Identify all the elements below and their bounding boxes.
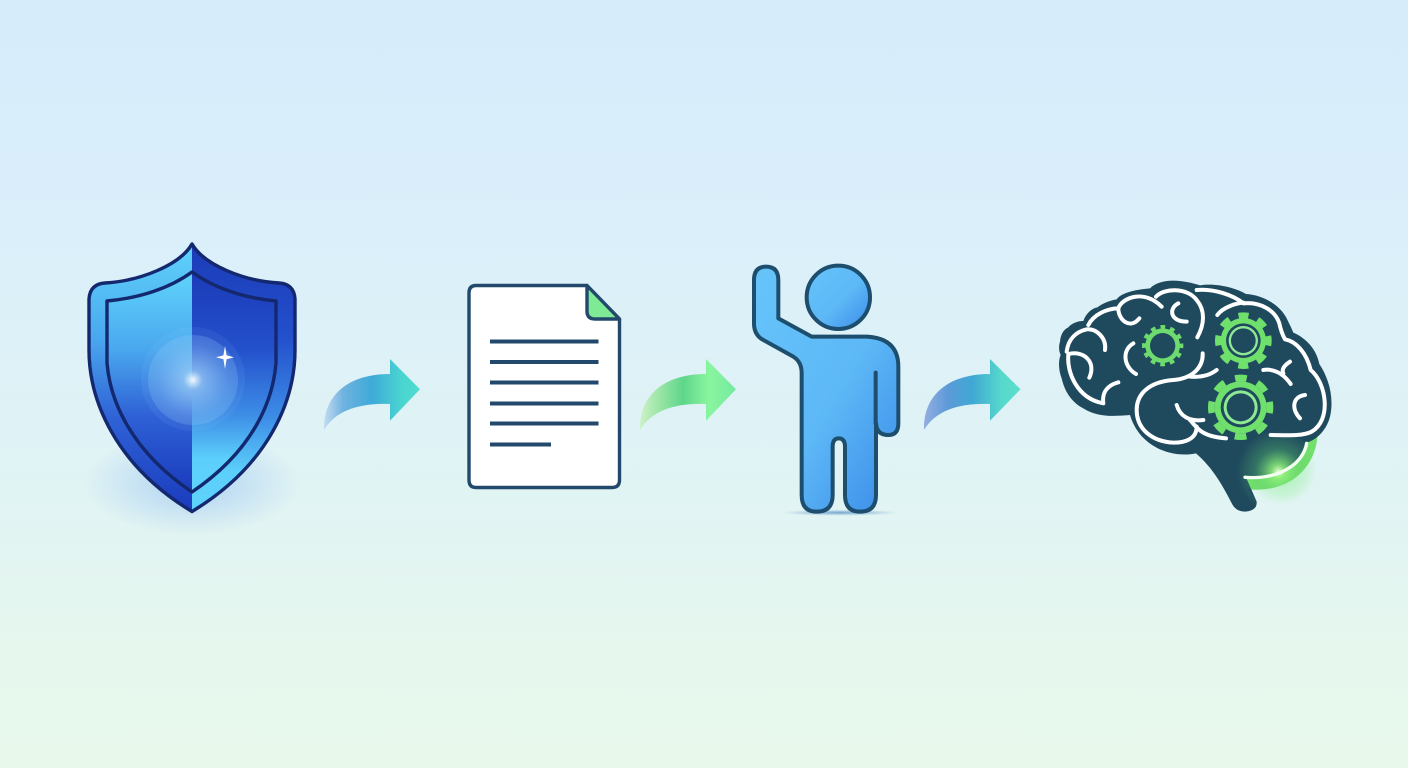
gear: upper large (1218, 315, 1269, 366)
icon: shield glow orb (141, 327, 245, 431)
arrow: document to person (640, 359, 736, 430)
icon: folded corner (587, 286, 620, 319)
person body (754, 267, 898, 512)
icon: person waving (754, 266, 898, 516)
text lines (490, 342, 598, 444)
brain folds (1067, 290, 1325, 443)
gear: small (1144, 327, 1181, 364)
icon: sparkle (216, 346, 234, 369)
gear: lower large (1211, 378, 1270, 437)
icon: shield (84, 244, 300, 536)
icon: brain with gears (1059, 281, 1332, 513)
arrow: shield to document (324, 359, 420, 430)
icon: document (469, 286, 620, 488)
brain green arc (1245, 435, 1317, 490)
brain silhouette (1059, 281, 1332, 512)
brain outer glow (1247, 435, 1317, 505)
person head (807, 266, 870, 329)
brain glow (1240, 435, 1304, 502)
arrow: person to brain (924, 359, 1020, 430)
